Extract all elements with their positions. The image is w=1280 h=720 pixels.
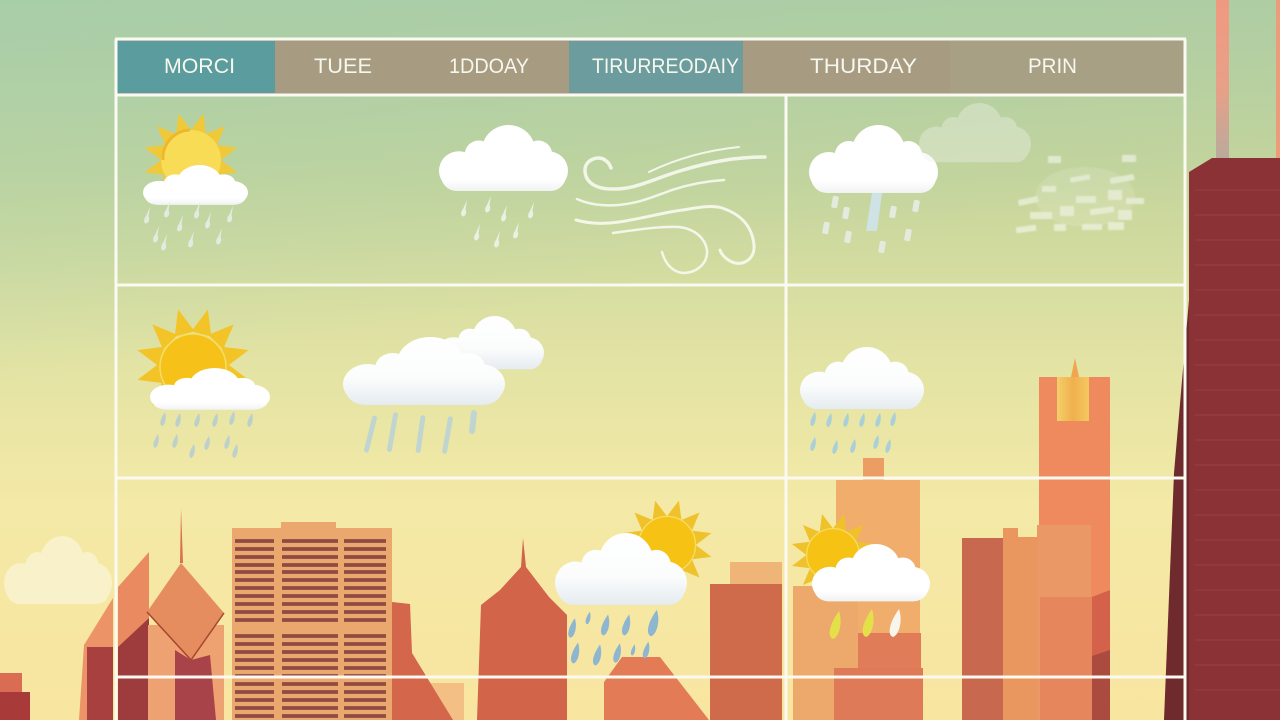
label: Thursday: THURDAY xyxy=(810,55,917,78)
forecast table grid xyxy=(115,39,1186,720)
icon: rain cloud, Thursday row 2 xyxy=(800,347,924,454)
icon: wind swirls xyxy=(576,147,765,273)
building: left tower xyxy=(79,598,113,720)
icon: sun with cloud and rain, row 2 xyxy=(135,307,270,458)
building: diamond tower xyxy=(147,508,224,720)
icon: rain cloud, Thursday row 1 xyxy=(809,125,938,253)
building: slope xyxy=(392,602,464,720)
icon: faded cloud, row 1 xyxy=(919,103,1031,162)
icon: sun, cloud and yellow drops, row 3 xyxy=(790,512,930,639)
building: far left xyxy=(0,673,30,720)
label: Monday: MORCI xyxy=(164,55,235,78)
icon: sleet texture xyxy=(1016,155,1144,233)
label: Tuesday: TUEE xyxy=(314,55,372,78)
building: low trapezoid xyxy=(604,657,709,720)
label: Friday: PRIN xyxy=(1028,55,1077,78)
building: large dark tower with antennas xyxy=(1164,0,1280,720)
icon: rain cloud, row 1 xyxy=(439,125,568,248)
building: striped tower xyxy=(232,522,392,720)
building: right cluster xyxy=(962,358,1110,720)
building: orange block xyxy=(793,458,923,720)
weekday header bar xyxy=(116,40,1186,94)
label: Wednesday: TIRURREODAIY xyxy=(592,55,739,78)
icon: double rain cloud, row 2 xyxy=(343,316,544,454)
icon: sun, cloud and heavy rain, row 3 xyxy=(555,498,714,666)
faded cloud left xyxy=(4,536,112,604)
building: mid tower xyxy=(710,562,782,720)
label: Today: 1DDOAY xyxy=(449,55,529,78)
building: slanted tower xyxy=(118,552,149,720)
building: spire tower xyxy=(477,538,567,720)
icon: sun with cloud and rain, row 1 xyxy=(142,111,248,251)
